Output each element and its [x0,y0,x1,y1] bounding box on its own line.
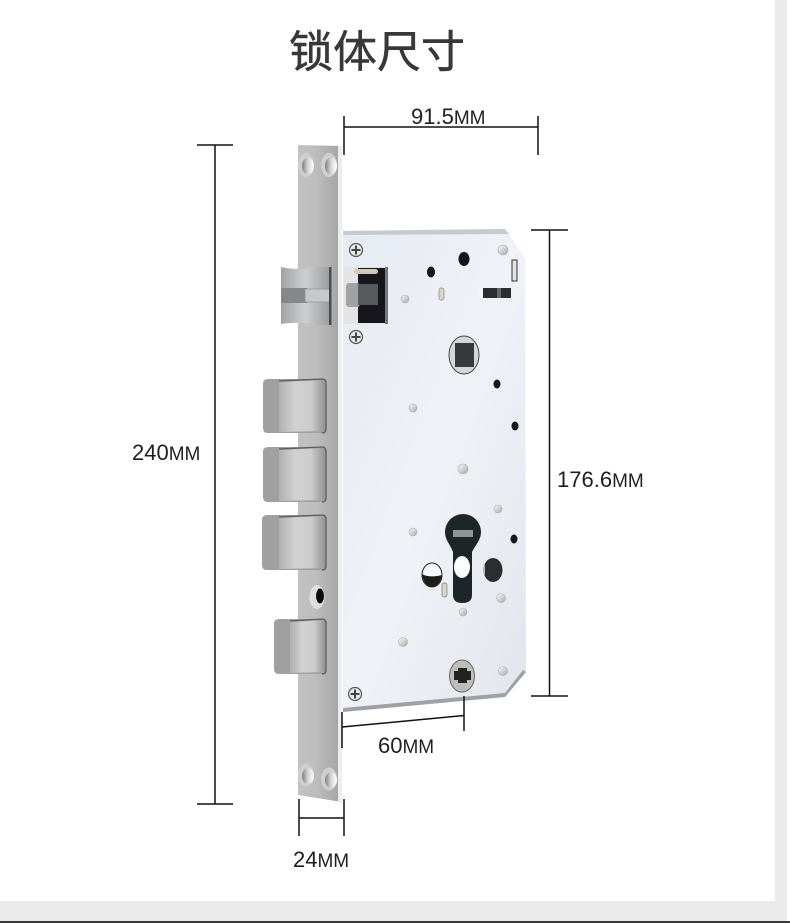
cylinder cutout [445,514,481,603]
dimension: 240mm height [132,145,233,804]
small holes [427,252,518,544]
dimension: 176.6mm height [531,230,644,696]
dimension: 240mm height: 240MM [132,440,200,465]
latch window [343,267,388,324]
deadbolt 4 [274,619,326,674]
lock product photo [262,145,526,802]
deadbolt 2 [263,447,326,502]
icon: faceplate screw holes top [298,153,337,177]
side holes [422,558,502,587]
deadbolt 3 [262,515,326,570]
dimension: 60mm offset: 60MM [378,733,434,758]
spindle hole [449,336,479,374]
latch bolt [281,267,332,325]
title: 锁体尺寸 [289,28,465,77]
dimension: 176.6mm height: 176.6MM [557,467,644,492]
icon: faceplate small hole [310,585,324,609]
icon: faceplate screw holes bottom [298,764,337,790]
deadbolt 1 [263,379,326,433]
lock faceplate [298,145,342,802]
dimension: 60mm offset [342,696,464,758]
dimension: 91.5mm width: 91.5MM [411,104,485,129]
dimension: 24mm faceplate width: 24MM [293,847,349,872]
slots [439,260,517,597]
rivets [398,245,508,676]
lock case [343,229,526,712]
deadbolts [262,379,326,674]
dimension: 91.5mm width [344,104,538,155]
bottom keyed hole [450,660,474,692]
screws [348,244,362,700]
dimension: 24mm faceplate width [293,799,349,872]
